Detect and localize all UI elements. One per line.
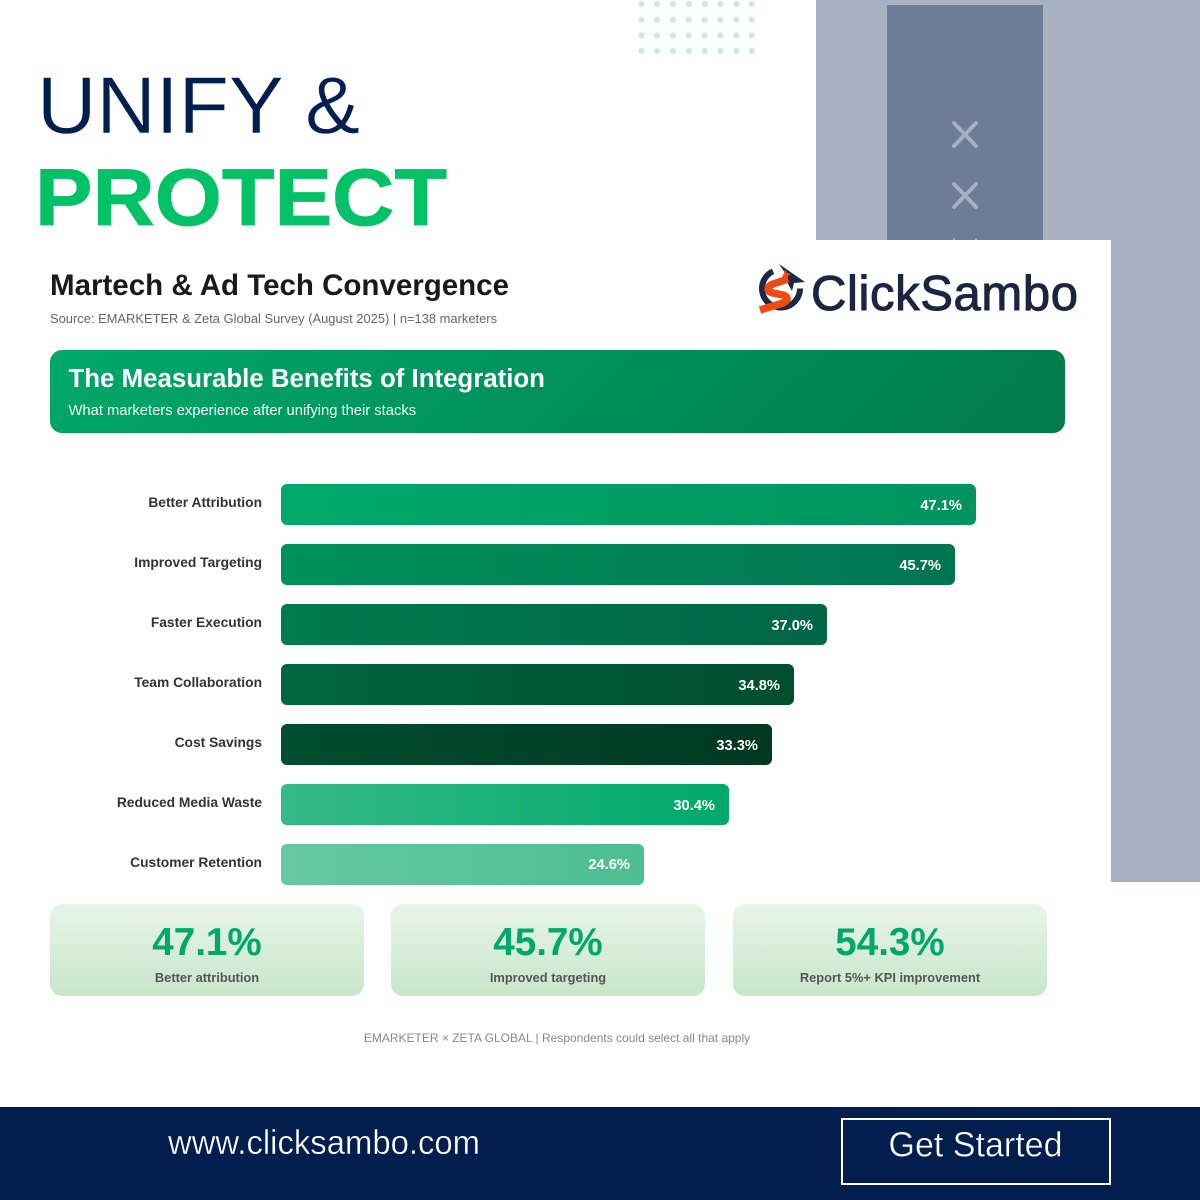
footer bar	[0, 1107, 1200, 1200]
stat card: better attribution: 47.1%	[152, 921, 262, 964]
bar: Faster Execution: 37.0%	[771, 618, 813, 634]
bar: Team Collaboration	[134, 664, 794, 705]
stat card: improved targeting: 45.7%	[493, 921, 603, 964]
banner heading: The Measurable Benefits of Integration	[68, 365, 545, 393]
bar: Reduced Media Waste: Reduced Media Waste	[117, 795, 262, 810]
bar: Reduced Media Waste	[117, 784, 729, 825]
bar: Improved Targeting	[134, 544, 955, 585]
bar: Better Attribution: Better Attribution	[148, 495, 262, 510]
bar: Customer Retention	[130, 844, 644, 885]
button: get started: Get Started	[888, 1126, 1062, 1164]
source line: Source: EMARKETER & Zeta Global Survey (August 2025) | n=138 marketers	[50, 311, 497, 326]
bar: Improved Targeting: Improved Targeting	[134, 555, 262, 570]
decorative background strip: right side	[1111, 0, 1200, 882]
decorative dot grid	[638, 1, 755, 54]
bar: Customer Retention: 24.6%	[588, 857, 630, 873]
stat card: KPI improvement: 54.3%	[835, 921, 945, 964]
bar: Better Attribution: 47.1%	[920, 498, 962, 514]
bar: Cost Savings: Cost Savings	[175, 735, 262, 750]
bar: Faster Execution: Faster Execution	[151, 615, 262, 630]
stat card: improved targeting: Improved targeting	[490, 970, 606, 985]
bar: Better Attribution	[148, 484, 976, 525]
button: get started	[841, 1118, 1111, 1185]
title: UNIFY &	[37, 61, 360, 151]
stat card: improved targeting	[391, 904, 705, 996]
decorative dark panel with crosses	[887, 5, 1043, 240]
banner subheading: What marketers experience after unifying their stacks	[68, 403, 416, 419]
bar chart	[117, 484, 976, 885]
stat card: better attribution: Better attribution	[155, 970, 259, 985]
bar: Reduced Media Waste: 30.4%	[673, 798, 715, 814]
bar: Cost Savings: 33.3%	[716, 738, 758, 754]
footnote: EMARKETER × ZETA GLOBAL | Respondents could select all that apply	[364, 1031, 750, 1045]
report heading: Martech & Ad Tech Convergence	[50, 268, 509, 302]
bar: Improved Targeting: 45.7%	[899, 558, 941, 574]
stat card: KPI improvement	[733, 904, 1047, 996]
bar: Team Collaboration: Team Collaboration	[134, 675, 262, 690]
stat card: KPI improvement: Report 5%+ KPI improvement	[800, 970, 980, 985]
bar: Cost Savings	[175, 724, 772, 765]
bar: Customer Retention: Customer Retention	[130, 855, 262, 870]
decorative background block: top right	[816, 0, 1200, 240]
bar: Faster Execution	[151, 604, 827, 645]
website URL: www.clicksambo.com	[167, 1124, 480, 1162]
title	[35, 61, 447, 235]
stat card: better attribution	[50, 904, 364, 996]
banner: measurable benefits	[50, 350, 1065, 433]
bar: Team Collaboration: 34.8%	[738, 678, 780, 694]
